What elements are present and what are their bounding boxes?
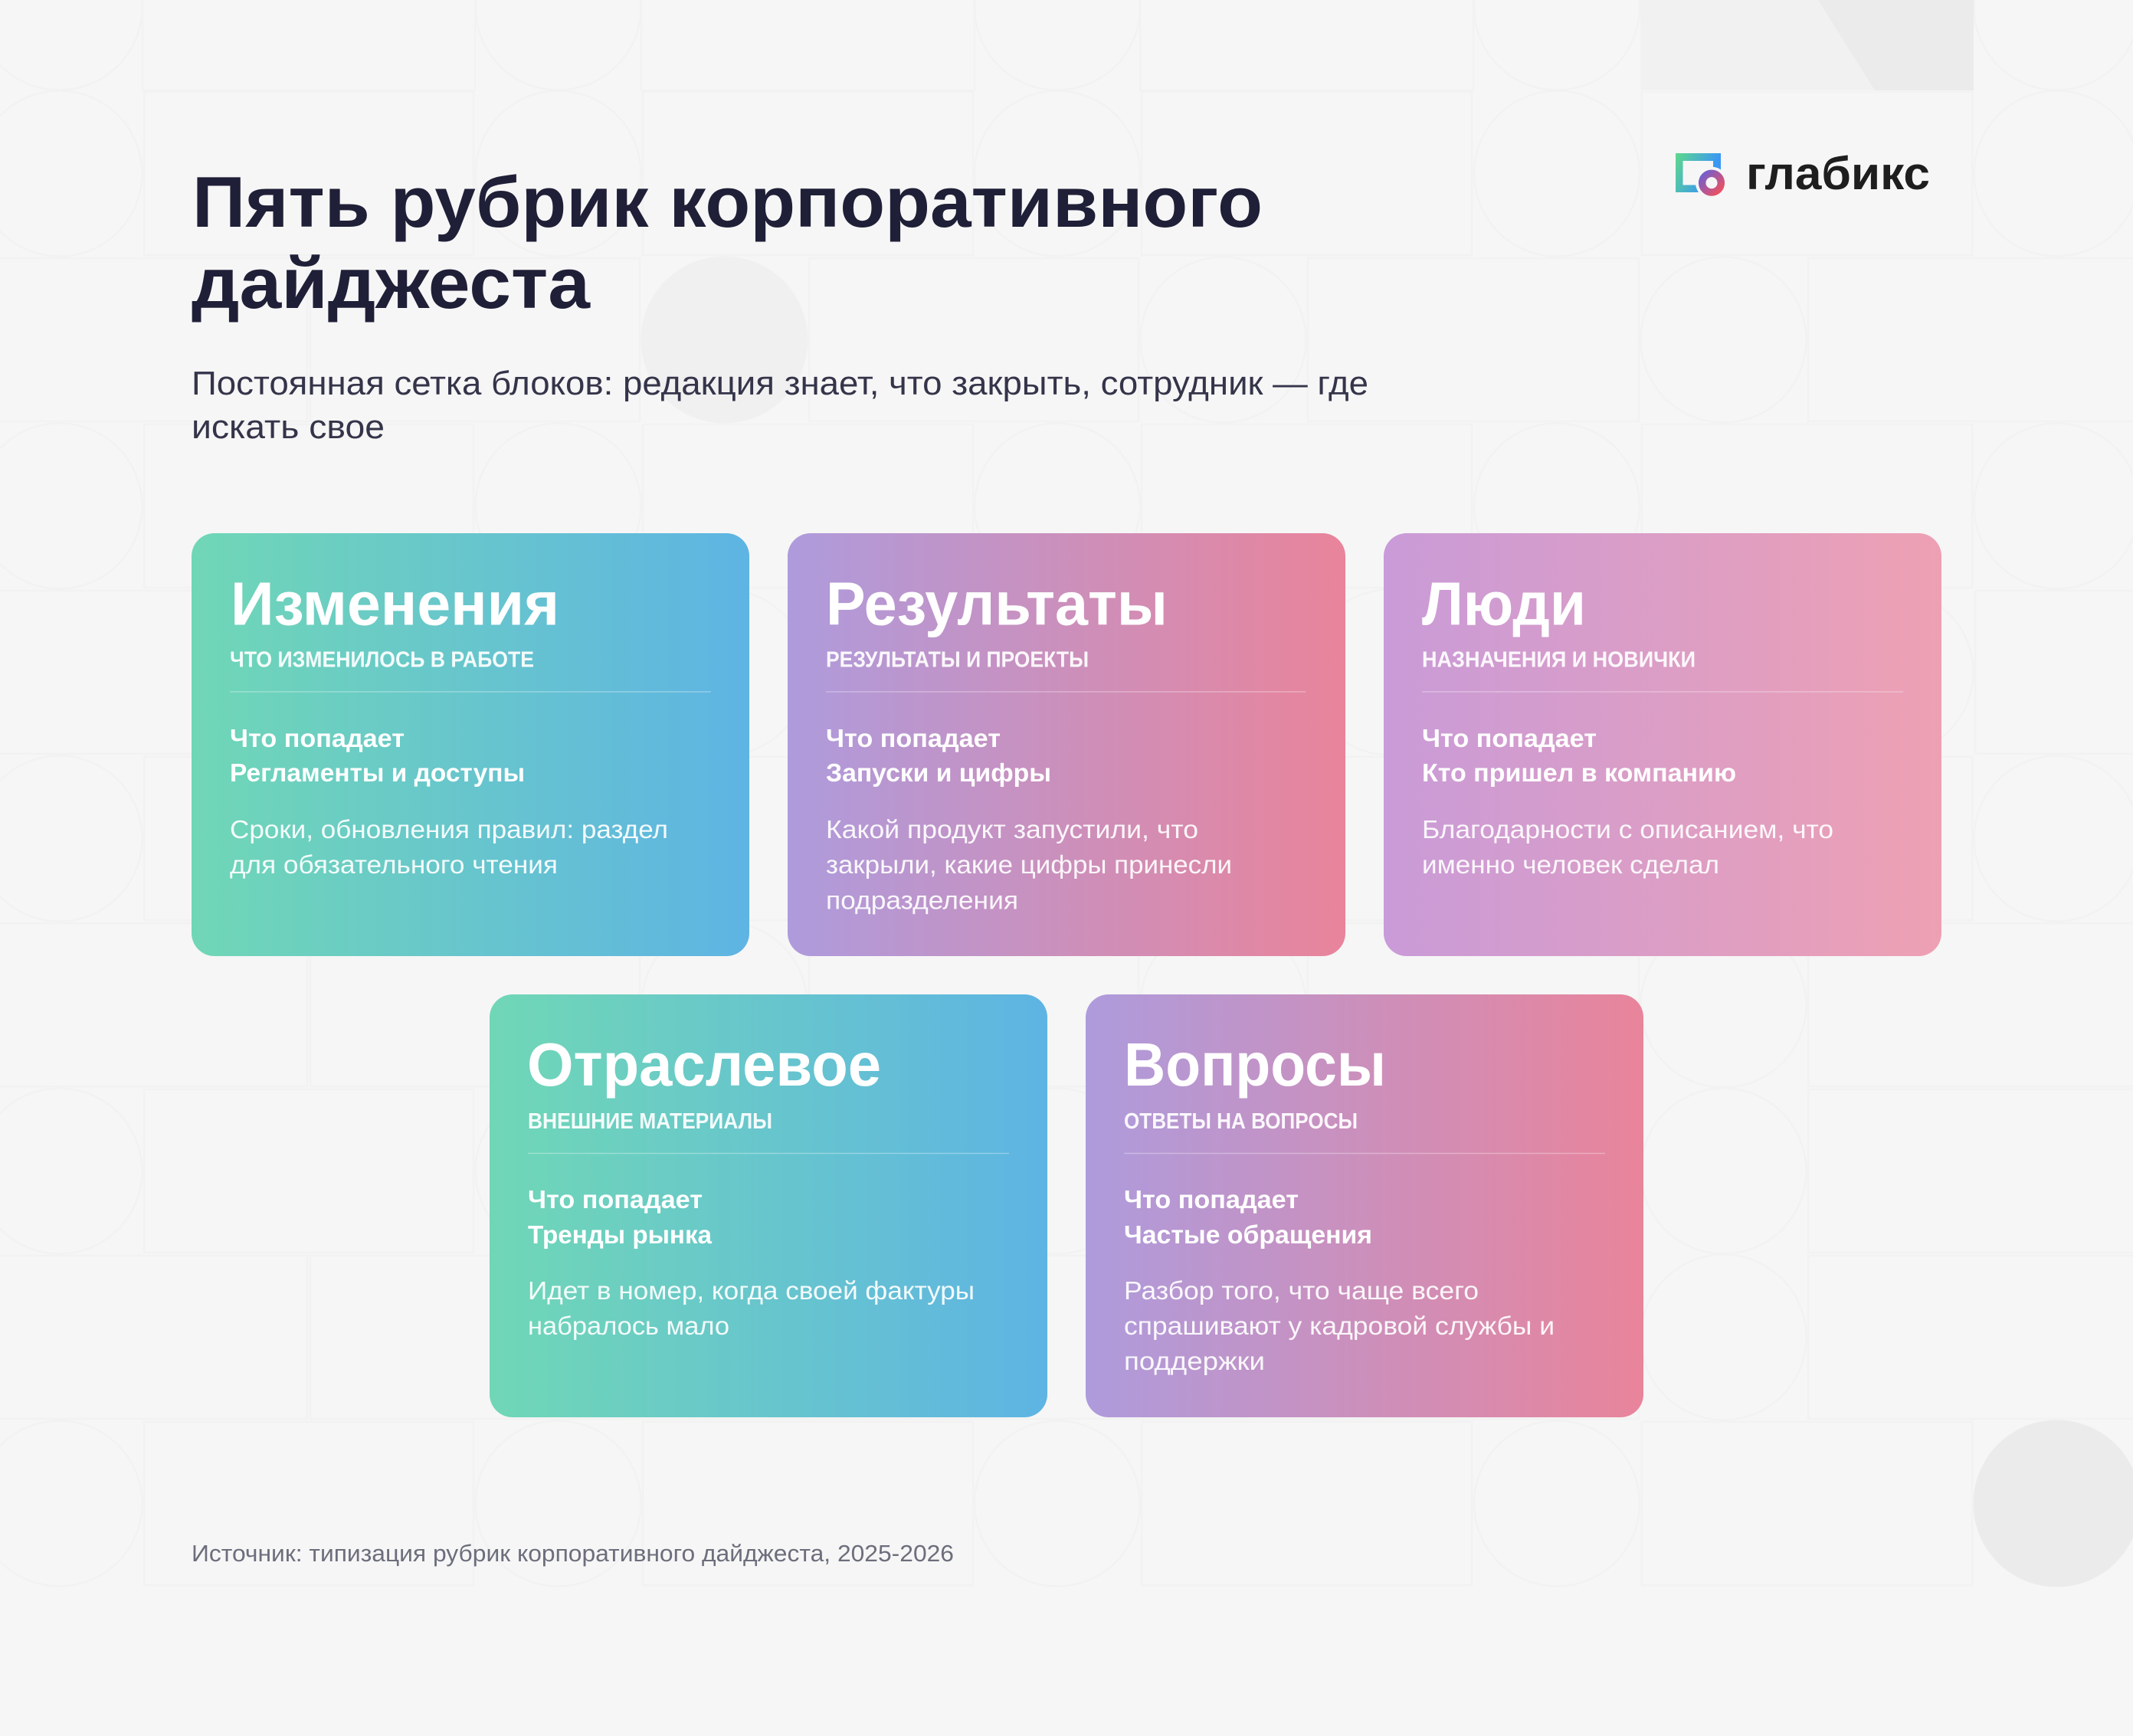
description [528,1276,975,1340]
logo [1676,148,1930,199]
what goes in: Регламенты и доступы [230,758,525,787]
description: Какой продукт запустили, что [826,815,1198,843]
heading: Отраслевое [527,1030,881,1099]
what goes in: Что попадает [230,724,405,752]
description: поддержки [1124,1347,1265,1375]
heading: Вопросы [1124,1030,1386,1099]
subheading: РЕЗУЛЬТАТЫ И ПРОЕКТЫ [826,648,1089,673]
subheading: ЧТО ИЗМЕНИЛОСЬ В РАБОТЕ [230,648,534,673]
description: Сроки, обновления правил: раздел [230,815,668,843]
panel: Изменения [192,533,749,956]
description: для обязательного чтения [230,850,558,879]
description: Разбор того, что чаще всего [1124,1276,1479,1305]
description [1422,815,1833,879]
what goes in: Что попадает [826,724,1001,752]
heading: Результаты [826,570,1168,637]
subheading: НАЗНАЧЕНИЯ И НОВИЧКИ [1422,648,1696,673]
panel: Результаты [788,533,1345,956]
what goes in: Тренды рынка [528,1220,713,1249]
description: подразделения [826,886,1018,915]
title [192,162,1263,323]
description: спрашивают у кадровой службы и [1124,1312,1555,1340]
panel: Люди [1384,533,1941,956]
source note: Источник: типизация рубрик корпоративного дайджеста, 2025-2026 [192,1540,954,1567]
description [826,815,1232,915]
subtitle [192,365,1368,446]
what goes in [1422,724,1736,787]
what goes in: Что попадает [1124,1185,1299,1214]
what goes in: Частые обращения [1124,1220,1372,1249]
subtitle: искать свое [192,408,385,446]
what goes in [1124,1185,1372,1249]
logo wordmark: глабикс [1746,148,1930,199]
icon: logo mark [1676,153,1728,199]
what goes in: Запуски и цифры [826,758,1051,787]
title: Пять рубрик корпоративного [192,162,1263,242]
description: Идет в номер, когда своей фактуры [528,1276,975,1305]
what goes in: Кто пришел в компанию [1422,758,1736,787]
grey accent shapes [641,0,2133,1587]
panel: Вопросы [1086,994,1643,1417]
what goes in [826,724,1051,787]
subtitle: Постоянная сетка блоков: редакция знает, что закрыть, сотрудник — где [192,365,1368,402]
description [1124,1276,1555,1375]
title: дайджеста [192,243,591,323]
what goes in: Что попадает [1422,724,1597,752]
subheading: ВНЕШНИЕ МАТЕРИАЛЫ [528,1109,772,1134]
what goes in: Что попадает [528,1185,703,1214]
what goes in [528,1185,713,1249]
description [230,815,668,879]
what goes in [230,724,525,787]
subheading: ОТВЕТЫ НА ВОПРОСЫ [1124,1109,1358,1134]
heading: Люди [1422,570,1586,637]
description: закрыли, какие цифры принесли [826,850,1232,879]
description: набралось мало [528,1312,729,1340]
heading: Изменения [231,570,559,637]
panel: Отраслевое [490,994,1047,1417]
description: Благодарности с описанием, что [1422,815,1833,843]
description: именно человек сделал [1422,850,1719,879]
